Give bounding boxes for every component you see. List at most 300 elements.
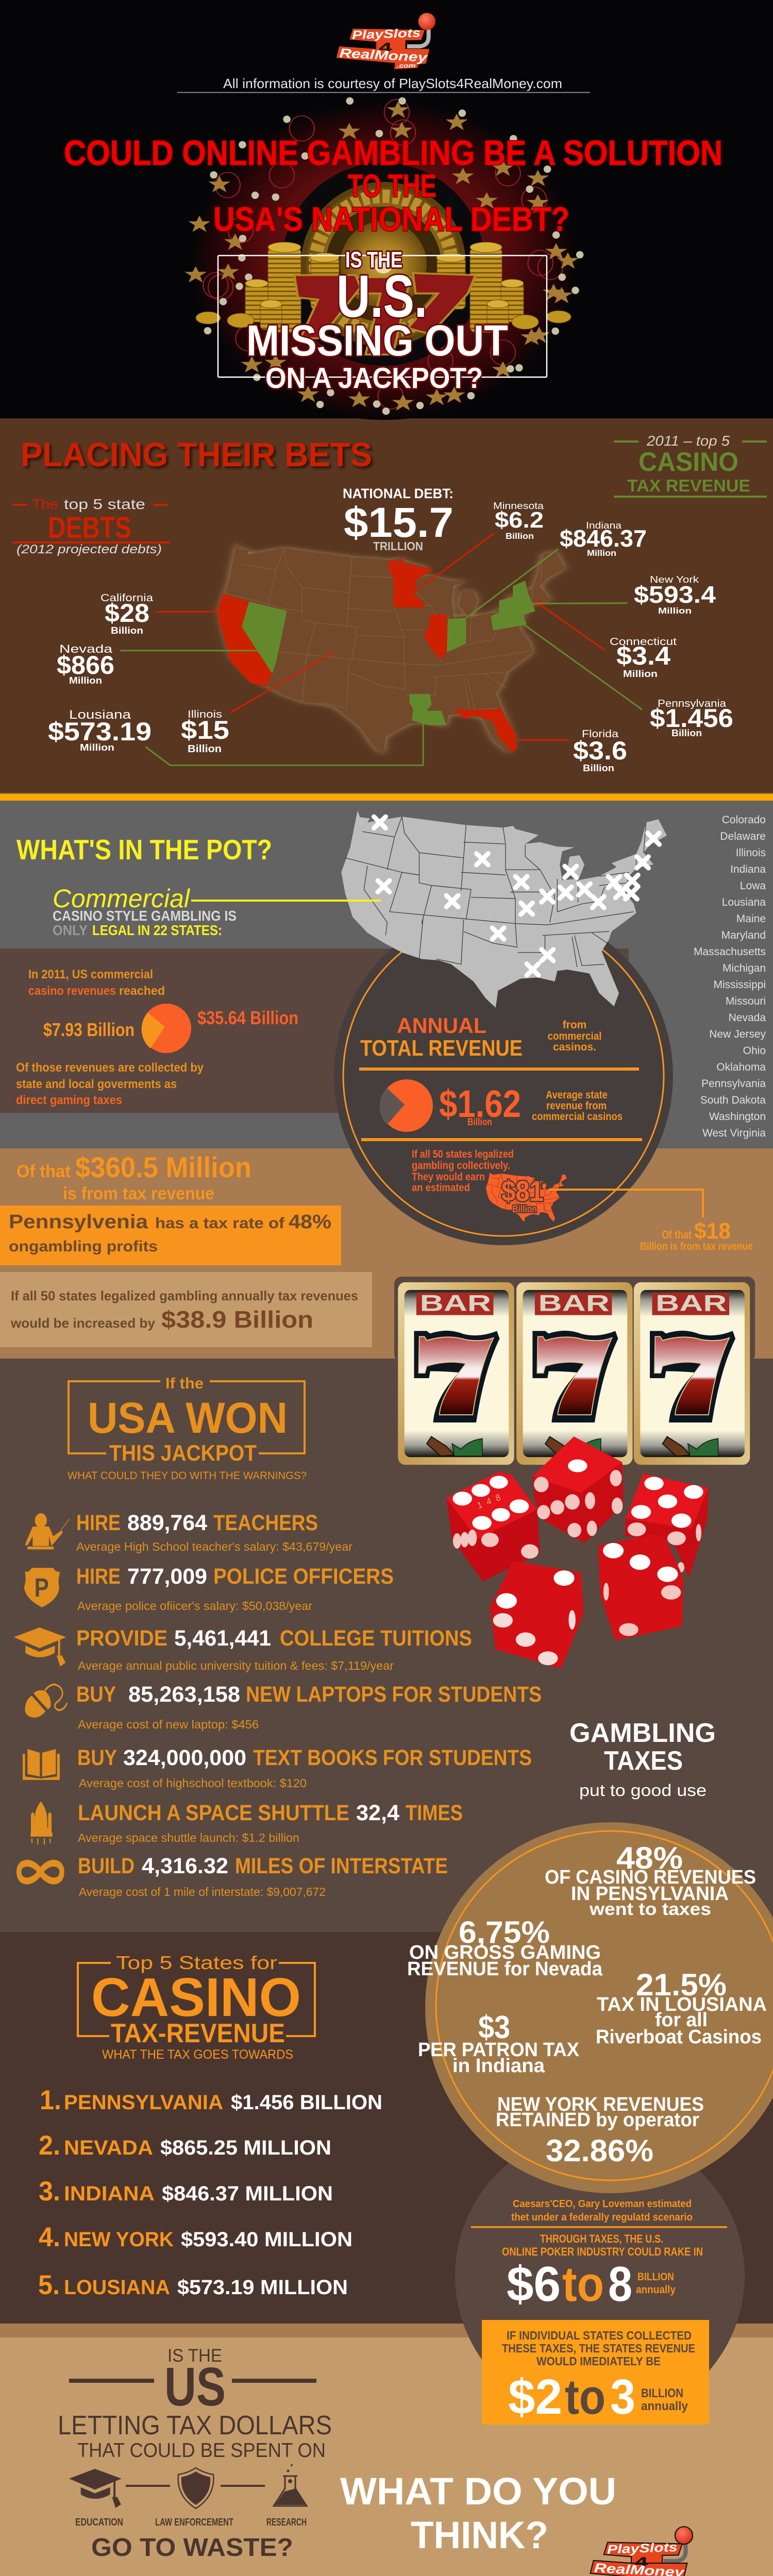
item: miles of interstate: [19, 1854, 448, 1899]
label: Pennsylvania: $1.456: [650, 704, 733, 733]
heading box: top 5 states for casino tax revenue: CASINO: [91, 1967, 301, 2028]
item: teachers: 889,764: [127, 1511, 207, 1535]
panel: 2011 casino revenues: direct gaming taxes: [16, 1093, 122, 1107]
red dice: [446, 1436, 709, 1669]
rank 2: $865.25 MILLION: [160, 2137, 331, 2159]
panel: 2011 casino revenues: state and local goverments as: [16, 1077, 177, 1091]
panel: 2011 casino revenues: Of those revenues are collected by: [16, 1061, 204, 1075]
callout: $360.5 million: [16, 1151, 251, 1204]
callout box: states revenue: BILLION: [641, 2386, 683, 2400]
list: legal states: West Virginia: [702, 1127, 766, 1139]
panel: 2011 casino revenues: $7.93 Billion: [43, 1019, 135, 1040]
closing question: is the US letting tax dollars go to waste: LETTING TAX DOLLARS: [58, 2411, 332, 2441]
label: Minnesota: Minnesota: [493, 501, 544, 511]
heading box: top 5 states for casino tax revenue: Top 5 States for: [116, 1952, 277, 1973]
heading: placing their bets: PLACING THEIR BETS: [21, 435, 372, 473]
heading: gambling taxes put to good use: put to good use: [579, 1781, 707, 1800]
label: New York: Million: [658, 606, 692, 616]
rank 3: [39, 2176, 333, 2207]
callout: online poker could rake in: thet under a federally regulatd scenario: [511, 2212, 693, 2223]
logo: PlaySlots4RealMoney: 4: [379, 40, 392, 55]
state: Minnesota: [389, 556, 433, 607]
slot machine reels: [394, 1277, 755, 1465]
heading box: if the USA won this jackpot: USA WON: [88, 1394, 288, 1442]
heading box: if the USA won this jackpot: WHAT COULD THEY DO WITH THE WARNINGS?: [68, 1470, 307, 1482]
fact: New York 32.86%: NEW YORK REVENUES: [497, 2094, 704, 2115]
call to action: what do you think: THINK?: [411, 2514, 548, 2556]
callout box: states revenue: annually: [641, 2399, 688, 2413]
rank 4: NEW YORK: [64, 2228, 174, 2251]
fact: Nevada 6.75%: REVENUE for Nevada: [407, 1958, 603, 1980]
list: legal states: Lowa: [740, 880, 766, 892]
rank 3: INDIANA: [64, 2182, 155, 2205]
callout box: states revenue: WOULD IMEDIATELY BE: [536, 2354, 661, 2368]
callout: online poker could rake in: THROUGH TAXES, THE U.S.: [540, 2232, 663, 2245]
rank 1: 1.: [40, 2085, 61, 2115]
courtesy line: All information is courtesy of PlaySlots4RealMoney.com: [223, 76, 562, 91]
reel 3: [634, 1282, 750, 1465]
legend: 2011 top 5 casino tax revenue: TAX REVENUE: [627, 476, 750, 495]
label: California: Billion: [111, 625, 143, 636]
annual total revenue heading: [359, 1013, 639, 1071]
rank 3: 3.: [39, 2176, 60, 2207]
list: legal states: Maine: [736, 913, 766, 925]
callout: online poker could rake in: to: [562, 2257, 604, 2312]
callout box: states revenue: $2: [508, 2369, 562, 2425]
subtitle box: is the U.S. missing out on a jackpot: [218, 247, 547, 395]
rank 2: 2.: [39, 2130, 60, 2161]
pie chart: average state revenue: [380, 1079, 433, 1132]
panel: Pennsylvania tax rate: [0, 1206, 341, 1265]
title: could online gambling: [64, 133, 722, 238]
rank 4: $593.40 MILLION: [181, 2228, 352, 2251]
label: California: $28: [105, 599, 149, 628]
callout: online poker could rake in: annually: [636, 2284, 676, 2296]
subtitle box: is the U.S. missing out on a jackpot: IS THE: [345, 247, 402, 273]
average state revenue: [361, 1079, 642, 1141]
callout: online poker could rake in: ONLINE POKER INDUSTRY COULD RAKE IN: [502, 2245, 703, 2258]
icon: police badge: P: [35, 1573, 49, 1603]
rank 1: $1.456 BILLION: [231, 2091, 382, 2114]
item: police officers: [24, 1564, 394, 1613]
label: Pennsylvania: Billion: [671, 728, 702, 738]
label: California: California: [100, 592, 154, 604]
small US map with $81 Billion: [486, 1172, 567, 1222]
rank 5: LOUSIANA: [64, 2276, 170, 2299]
average state revenue: commercial casinos: [532, 1111, 623, 1123]
label: Pennsylvania: [650, 698, 733, 738]
list: legal states: New Jersey: [709, 1028, 766, 1040]
subtitle box: is the U.S. missing out on a jackpot: MISSING OUT: [246, 316, 508, 365]
icon: space shuttle: [30, 1801, 53, 1844]
national debt callout: TRILLION: [373, 539, 423, 553]
legend: top 5 state debts: [12, 496, 170, 556]
heading box: if the USA won this jackpot: [68, 1375, 307, 1482]
item: space shuttle: [30, 1801, 463, 1844]
legend: top 5 state debts: (2012 projected debts): [16, 543, 162, 556]
label: Connecticut: Connecticut: [610, 636, 677, 648]
label: Lousiana: Million: [80, 742, 114, 753]
callout: online poker could rake in: Caesars'CEO, Gary Loveman estimated: [513, 2198, 692, 2210]
icon: open book: [23, 1749, 60, 1780]
fact: Indiana $3: PER PATRON TAX: [418, 2039, 580, 2061]
callout: $360.5 million: $360.5 Million: [75, 1151, 251, 1183]
callout box: states revenue: IF INDIVIDUAL STATES COLLECTED: [507, 2329, 692, 2342]
closing question: is the US letting tax dollars go to waste: RESEARCH: [266, 2517, 307, 2528]
logo: footer PlaySlots4RealMoney: 4: [634, 2554, 649, 2570]
legend: 2011 top 5 casino tax revenue: [614, 433, 767, 498]
circle: gambling tax facts: [407, 1822, 773, 2193]
panel: tax revenues would increase: [0, 1272, 372, 1347]
national debt callout: $15.7: [344, 499, 453, 546]
rank 5: 5.: [38, 2270, 60, 2300]
subtitle box: is the U.S. missing out on a jackpot: U.S.: [337, 263, 427, 330]
fact: Nevada 6.75%: ON GROSS GAMING: [409, 1942, 601, 1963]
logo: PlaySlots4RealMoney: RealMoney: [339, 46, 428, 65]
callout: commercial casino gambling legal: ONLY: [53, 922, 88, 938]
item: new laptops: 85,263,158: [128, 1682, 240, 1707]
estimate: all 50 states: If all 50 states legalized: [412, 1148, 514, 1160]
label: New York: $593.4: [634, 581, 716, 608]
label: Lousiana: Lousiana: [69, 708, 131, 722]
reel 1: BAR: [420, 1291, 491, 1316]
callout: commercial casino gambling legal: Commercial: [53, 884, 191, 913]
label: Indiana: $846.37: [560, 525, 647, 552]
panel: Pennsylvania tax rate: ongambling profits: [9, 1238, 158, 1255]
panel: Pennsylvania tax rate: has a tax rate of: [155, 1215, 285, 1232]
fact: New York 32.86%: RETAINED by operator: [496, 2109, 699, 2131]
state: Indiana: [447, 618, 466, 652]
fact: Lousiana 21.5%: for all: [655, 2009, 708, 2031]
state: Louisiana: [409, 694, 446, 725]
label: Indiana: Indiana: [586, 520, 622, 531]
list: legal states: South Dakota: [700, 1094, 766, 1106]
item: college tuitions: 5,461,441: [174, 1626, 271, 1651]
legend: top 5 state debts: DEBTS: [48, 511, 131, 545]
item: police officers: Average police ofiicer's salary: $50,038/year: [77, 1599, 312, 1613]
fact: Indiana $3: in Indiana: [452, 2055, 545, 2077]
item: space shuttle: 32,4: [356, 1801, 399, 1825]
fact: Nevada 6.75%: 6,75%: [459, 1915, 550, 1950]
die: right: [625, 1474, 709, 1578]
list: legal states: Nevada: [729, 1012, 766, 1024]
roulette wheel: [282, 163, 485, 366]
label: Indiana: Million: [587, 548, 616, 558]
list: legal states: Illinois: [736, 847, 766, 859]
estimate: all 50 states: gambling collectively.: [412, 1160, 510, 1172]
item: teachers: Average High School teacher's salary: $43,679/year: [76, 1540, 352, 1553]
rank 5: [38, 2270, 348, 2300]
annual total revenue heading: casinos.: [553, 1041, 596, 1053]
panel: tax revenues would increase: $38.9 Billion: [161, 1306, 313, 1333]
logo: PlaySlots4RealMoney: [337, 13, 435, 69]
die: top: [532, 1436, 624, 1543]
annual total revenue heading: commercial: [547, 1030, 602, 1042]
list: legal states: Lousiana: [722, 896, 766, 908]
list: legal states: Missouri: [726, 995, 766, 1007]
item: space shuttle: TIMES: [406, 1801, 463, 1825]
fact: Pennsylvania 48%: 48%: [616, 1841, 683, 1875]
state: Illinois: [424, 614, 449, 659]
estimate: all 50 states: They would earn: [412, 1171, 485, 1183]
state: Nevada: [242, 602, 287, 674]
item: college tuitions: Average annual public university tuition & fees: $7,119/year: [78, 1659, 394, 1672]
heading: gambling taxes put to good use: GAMBLING: [569, 1718, 716, 1748]
connector line to $18: [549, 1190, 703, 1217]
leader lines: [121, 533, 642, 765]
die: lower left: [490, 1561, 583, 1669]
fact: Lousiana 21.5%: Riverboat Casinos: [596, 2026, 762, 2048]
closing question: is the US letting tax dollars go to waste: US: [164, 2357, 226, 2417]
coin stacks: [196, 242, 571, 332]
label: Nevada: Million: [69, 675, 102, 686]
list: legal states: Ohio: [743, 1045, 766, 1057]
icon: education cap: [69, 2469, 122, 2508]
legend: top 5 state debts: The: [32, 496, 58, 512]
rank 1: [40, 2085, 382, 2115]
fact: Pennsylvania 48%: OF CASINO REVENUES: [545, 1867, 756, 1888]
logo: footer PlaySlots4RealMoney: [591, 2527, 693, 2576]
map labels: state figures: [48, 501, 733, 773]
item: teachers: [25, 1511, 352, 1553]
die: left with 148: [446, 1472, 540, 1581]
item: miles of interstate: BUILD: [78, 1854, 135, 1878]
die: lower right: [598, 1534, 683, 1640]
label: Nevada: $866: [57, 651, 114, 680]
fact: Pennsylvania 48%: [545, 1841, 756, 1919]
callout: commercial casino gambling legal: CASINO STYLE GAMBLING IS: [53, 908, 237, 924]
closing question: is the US letting tax dollars go to waste: THAT COULD BE SPENT ON: [77, 2439, 326, 2462]
closing question: is the US letting tax dollars go to waste: IS THE: [167, 2346, 222, 2366]
national debt callout: [343, 486, 453, 553]
panel: 2011 casino revenues: In 2011, US commercial: [28, 968, 153, 981]
item: new laptops: Average cost of new laptop: $456: [78, 1718, 259, 1731]
label: Illinois: Illinois: [188, 709, 222, 720]
state: California: [219, 594, 272, 686]
label: Connecticut: [610, 636, 677, 679]
label: Lousiana: $573.19: [48, 717, 152, 746]
panel: Pennsylvania tax rate: 48%: [289, 1211, 331, 1233]
callout: online poker could rake in: BILLION: [637, 2271, 674, 2283]
icon: computer mouse: [25, 1685, 67, 1718]
small US map with $81 Billion: Billion: [512, 1204, 537, 1215]
fact: Pennsylvania 48%: IN PENSYLVANIA: [571, 1883, 729, 1905]
item: text books: Average cost of highschool textbook: $120: [79, 1776, 307, 1790]
list: legal states: Colorado: [722, 814, 766, 826]
list: legal states: Indiana: [730, 863, 766, 875]
label: Minnesota: $6.2: [495, 507, 544, 533]
label: Florida: $3.6: [573, 736, 627, 765]
callout: online poker could rake in: $6: [507, 2257, 561, 2312]
icon: teacher: [25, 1513, 70, 1549]
item: space shuttle: LAUNCH A SPACE SHUTTLE: [78, 1801, 349, 1825]
closing question: is the US letting tax dollars go to waste: EDUCATION: [75, 2517, 123, 2528]
callout: $18 billion from tax revenue: [640, 1218, 753, 1252]
item: text books: TEXT BOOKS FOR STUDENTS: [253, 1745, 532, 1770]
item: miles of interstate: 4,316.32: [142, 1854, 228, 1878]
fact: Lousiana 21.5%: 21.5%: [636, 1968, 727, 2002]
closing question: is the US letting tax dollars go to waste: [58, 2346, 332, 2562]
rank 5: $573.19 MILLION: [177, 2276, 348, 2299]
heading: gambling taxes put to good use: [569, 1718, 716, 1800]
state: Connecticut: [534, 600, 543, 605]
item: new laptops: [25, 1682, 542, 1731]
callout: online poker could rake in: 8: [608, 2257, 632, 2312]
callout: $360.5 million: Of that: [16, 1162, 71, 1181]
icon: graduation cap: [14, 1628, 66, 1666]
average state revenue: $1.62: [439, 1082, 521, 1125]
map: placing bets USA: [121, 533, 642, 765]
label: Connecticut: Million: [623, 669, 658, 679]
label: Illinois: $15: [181, 716, 229, 744]
logo: PlaySlots4RealMoney: .com: [397, 62, 416, 69]
heading: placing their bets: PLACING THEIR BETS: [23, 437, 374, 476]
heading: what's in the pot: WHAT'S IN THE POT?: [16, 834, 272, 866]
label: Lousiana: [48, 708, 152, 753]
label: Illinois: [181, 709, 229, 755]
list: top 5 states: [38, 2085, 382, 2300]
estimate: all 50 states: [412, 1148, 567, 1222]
item: text books: BUY: [77, 1745, 117, 1770]
label: Florida: [573, 728, 627, 773]
title: could online gambling: TO THE: [348, 168, 436, 204]
label: New York: New York: [650, 574, 699, 585]
callout: $18 billion from tax revenue: Billion is from tax revenue: [640, 1241, 753, 1252]
item: miles of interstate: MILES OF INTERSTATE: [235, 1854, 448, 1878]
label: California: [100, 592, 154, 636]
label: Florida: Florida: [582, 728, 619, 740]
fact: Lousiana 21.5%: TAX IN LOUSIANA: [597, 1994, 767, 2015]
closing question: is the US letting tax dollars go to waste: GO TO WASTE?: [91, 2534, 293, 2562]
heading: gambling taxes put to good use: TAXES: [604, 1746, 683, 1776]
label: Florida: Billion: [583, 763, 614, 773]
annual total revenue heading: from: [563, 1019, 586, 1031]
fact: New York 32.86%: [496, 2094, 704, 2168]
fact: Lousiana 21.5%: [596, 1968, 767, 2048]
list: legal states: [694, 814, 766, 1139]
rank 2: NEVADA: [64, 2137, 153, 2159]
callout box: states revenue: THESE TAXES, THE STATES REVENUE: [502, 2342, 695, 2355]
item: police officers: POLICE OFFICERS: [213, 1564, 394, 1589]
heading box: if the USA won this jackpot: THIS JACKPOT: [109, 1440, 257, 1466]
rank 1: PENNSYLVANIA: [64, 2091, 223, 2114]
reel 2: BAR: [539, 1291, 610, 1316]
heading box: if the USA won this jackpot: If the: [165, 1375, 204, 1392]
red sevens: [294, 273, 476, 354]
item: teachers: TEACHERS: [213, 1511, 318, 1535]
panel: tax revenues would increase: If all 50 states legalized gambling annually tax revenues: [11, 1288, 358, 1303]
list: legal states: Delaware: [720, 831, 766, 842]
item: space shuttle: Average space shuttle launch: $1.2 billion: [78, 1831, 299, 1844]
icon: law enforcement shield: [178, 2468, 213, 2509]
annual total revenue heading: ANNUAL: [397, 1013, 486, 1038]
reel 3: BAR: [656, 1291, 727, 1316]
callout box: states revenue: 3: [610, 2369, 635, 2425]
average state revenue: revenue from: [546, 1100, 607, 1112]
national debt callout: NATIONAL DEBT:: [343, 486, 453, 501]
subtitle box: is the U.S. missing out on a jackpot: ON A JACKPOT?: [265, 362, 483, 395]
list: legal states: Oklahoma: [716, 1061, 766, 1073]
label: New York: [634, 574, 716, 616]
logo: footer PlaySlots4RealMoney: PlaySlots: [607, 2540, 678, 2557]
average state revenue: Billion: [467, 1117, 492, 1128]
item: college tuitions: COLLEGE TUITIONS: [280, 1626, 472, 1651]
item: college tuitions: [14, 1626, 472, 1672]
item: miles of interstate: Average cost of 1 mile of interstate: $9,007,672: [79, 1885, 326, 1899]
legend: 2011 top 5 casino tax revenue: 2011 – top 5: [646, 433, 730, 449]
logo: PlaySlots4RealMoney: PlaySlots: [352, 26, 421, 42]
item: new laptops: NEW LAPTOPS FOR STUDENTS: [246, 1682, 542, 1707]
icon: infinity road: [19, 1863, 62, 1881]
casino illustration: roulette, coins, sevens, stars: [184, 97, 583, 420]
rank 2: [39, 2130, 331, 2161]
callout box: states revenue: [482, 2320, 709, 2425]
fact: Indiana $3: $3: [478, 2010, 510, 2045]
item: college tuitions: PROVIDE: [76, 1626, 167, 1651]
label: Minnesota: Billion: [506, 531, 534, 541]
icon: research flask: [274, 2464, 307, 2506]
heading box: top 5 states for casino tax revenue: WHAT THE TAX GOES TOWARDS: [102, 2047, 293, 2062]
label: Illinois: Billion: [188, 743, 222, 755]
list: legal states: Massachusetts: [694, 946, 766, 958]
legend: 2011 top 5 casino tax revenue: CASINO: [638, 447, 738, 477]
label: Minnesota: [493, 501, 544, 541]
legend: top 5 state debts: top 5 state: [64, 496, 145, 512]
rank 4: [39, 2222, 352, 2252]
annual total revenue heading: TOTAL REVENUE: [360, 1036, 523, 1061]
panel: 2011 casino revenues: reached: [119, 984, 165, 998]
rank 4: 4.: [39, 2222, 60, 2252]
call to action: what do you think: [340, 2470, 616, 2556]
title: could online gambling: USA'S NATIONAL DEBT?: [213, 200, 569, 238]
big circle: annual total revenue: [334, 906, 673, 1245]
estimate: all 50 states: an estimated: [412, 1182, 470, 1194]
fact: New York 32.86%: 32.86%: [546, 2133, 653, 2168]
call to action: what do you think: WHAT DO YOU: [340, 2470, 616, 2513]
label: Nevada: Nevada: [59, 642, 113, 655]
icon: police badge: [24, 1568, 60, 1607]
callout: $18 billion from tax revenue: Of that: [662, 1228, 692, 1241]
fact: Nevada 6.75%: [407, 1915, 603, 1980]
circle: online poker estimate background: [455, 2131, 745, 2420]
rank 3: $846.37 MILLION: [162, 2182, 333, 2205]
item: text books: 324,000,000: [123, 1745, 246, 1770]
callout box: states revenue: to: [565, 2369, 606, 2425]
panel: tax revenues would increase: would be increased by: [10, 1315, 156, 1331]
callout: commercial casino gambling legal: [53, 884, 381, 938]
callout: commercial casino gambling legal: LEGAL IN 22 STATES:: [92, 922, 222, 938]
panel: 2011 casino revenues: [16, 968, 298, 1107]
item: police officers: 777,009: [127, 1564, 207, 1589]
average state revenue: Average state: [546, 1089, 608, 1101]
label: Connecticut: $3.4: [616, 641, 670, 670]
item: teachers: HIRE: [76, 1511, 121, 1535]
states: New York and Pennsylvania: [491, 581, 535, 631]
map: states with legal commercial casinos: [341, 810, 667, 1008]
reel 2: [516, 1282, 633, 1465]
item: police officers: HIRE: [76, 1564, 121, 1589]
panel: 2011 casino revenues: casino revenues: [28, 984, 116, 998]
item: new laptops: BUY: [76, 1682, 116, 1707]
reel 1: [398, 1282, 514, 1465]
list: legal states: Washington: [709, 1111, 766, 1123]
heading box: top 5 states for casino tax revenue: TAX-REVENUE: [111, 2019, 285, 2048]
list: legal states: Maryland: [721, 929, 766, 941]
closing question: is the US letting tax dollars go to waste: LAW ENFORCEMENT: [155, 2517, 233, 2528]
small US map with $81 Billion: $81: [501, 1175, 544, 1207]
panel: Pennsylvania tax rate: Pennsylvenia: [9, 1211, 148, 1233]
callout: $360.5 million: is from tax revenue: [63, 1184, 214, 1204]
